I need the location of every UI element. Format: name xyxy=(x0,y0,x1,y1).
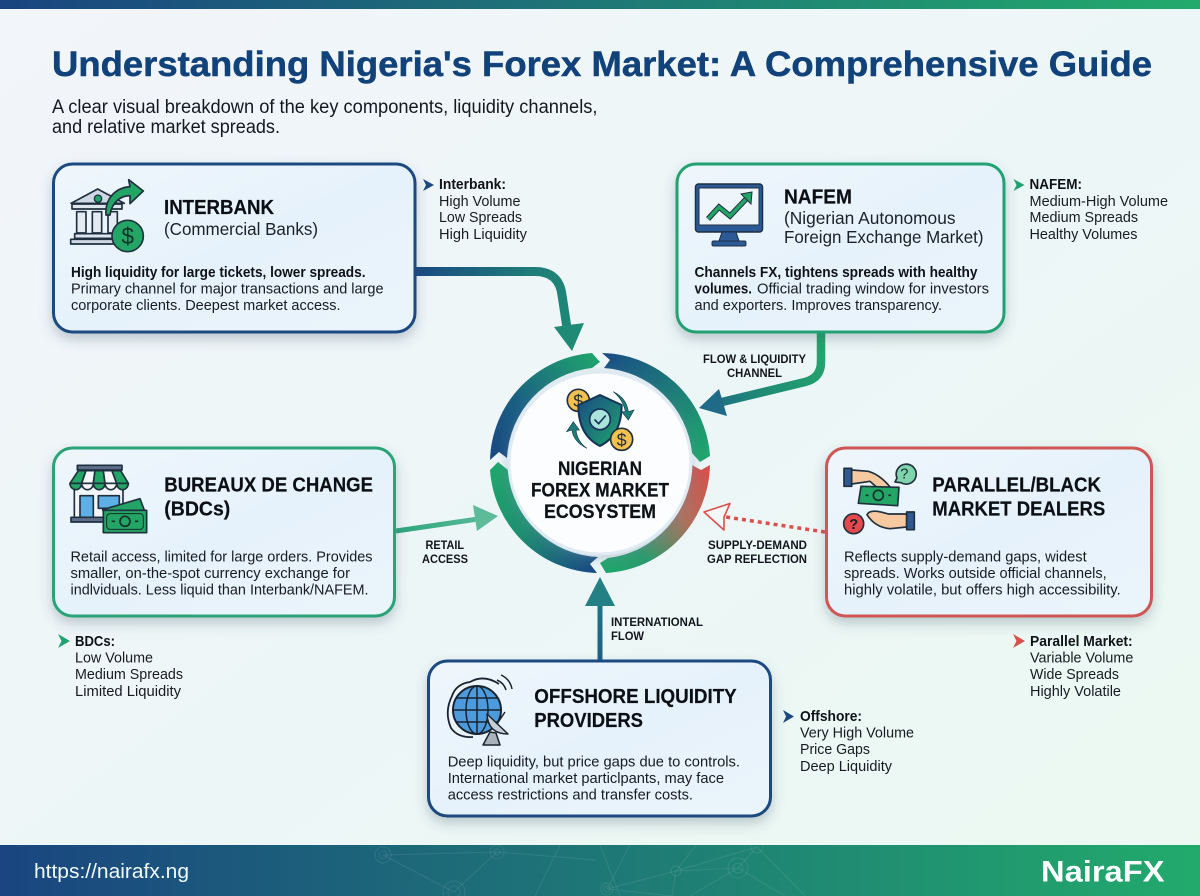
marker xyxy=(1014,179,1024,191)
marker xyxy=(58,634,70,648)
arrow: interbank to ecosystem xyxy=(416,272,584,351)
title: Understanding Nigeria's Forex Market: A Comprehensive Guide xyxy=(52,45,1152,84)
ecosystem hub xyxy=(490,353,710,573)
hub label: FOREX MARKET xyxy=(531,480,669,502)
arrow: offshore international flow xyxy=(585,577,615,661)
legend text: Low Volume xyxy=(75,650,153,666)
ring segment: bottom right xyxy=(600,465,710,573)
legend text: Interbank: xyxy=(439,177,506,193)
heading: (BDCs) xyxy=(164,498,230,520)
description: Channels FX, tightens spreads with healthy xyxy=(694,265,978,281)
legend text: Parallel Market: xyxy=(1030,634,1133,650)
description: smaller, on-the-spot currency exchange for xyxy=(70,566,350,582)
awning scallops xyxy=(70,483,128,490)
marker xyxy=(423,179,434,191)
legend text: Medium-High Volume xyxy=(1030,194,1168,210)
heading: MARKET DEALERS xyxy=(932,498,1105,520)
ring segment: top right xyxy=(602,353,710,462)
heading: PARALLEL/BLACK xyxy=(932,474,1101,496)
heading: NAFEM xyxy=(784,186,852,208)
label: flow and liquidity channel: CHANNEL xyxy=(727,366,782,380)
label: supply-demand gap reflection: SUPPLY-DEMAND xyxy=(708,538,807,552)
footer bar xyxy=(0,845,1200,896)
legend text: BDCs: xyxy=(75,634,115,650)
legend text: High Volume xyxy=(439,194,520,210)
icon: hands exchanging money: ? xyxy=(900,467,908,483)
legend text: Limited Liquidity xyxy=(75,684,182,700)
label: flow and liquidity channel: FLOW & LIQUIDITY xyxy=(703,352,806,366)
legend text xyxy=(1030,634,1133,700)
panel: NAFEM xyxy=(677,164,1004,332)
arrow: BDC retail access xyxy=(396,505,498,531)
icon: hands exchanging money xyxy=(844,464,916,534)
heading: OFFSHORE LIQUIDITY xyxy=(534,685,737,708)
legend: interbank xyxy=(423,177,528,243)
label: international flow xyxy=(611,615,703,643)
legend text: High Liquidity xyxy=(439,227,528,243)
legend text xyxy=(1030,177,1168,243)
subtitle: and relative market spreads. xyxy=(52,117,280,138)
card box xyxy=(54,164,415,332)
heading xyxy=(534,685,737,732)
ring segment: top left xyxy=(490,353,600,460)
legend: parallel market xyxy=(1013,634,1133,700)
hub label xyxy=(531,458,669,523)
hub label: ECOSYSTEM xyxy=(544,501,656,523)
footer brand: NairaFX xyxy=(1041,856,1164,888)
icon: bank with coin xyxy=(71,180,143,252)
legend text: NAFEM: xyxy=(1030,177,1082,193)
heading: PROVIDERS xyxy=(534,709,643,732)
description: access restrictions and transfer costs. xyxy=(448,788,693,804)
subtitle xyxy=(52,97,598,138)
panel: offshore liquidity providers xyxy=(428,661,770,816)
legend text: Medium Spreads xyxy=(75,667,183,683)
subtitle: A clear visual breakdown of the key components, liquidity channels, xyxy=(52,97,598,118)
hub label: NIGERIAN xyxy=(558,458,642,480)
description xyxy=(71,265,384,314)
description: International market particlpants, may face xyxy=(448,771,724,787)
marker xyxy=(783,710,794,723)
legend text: Highly Volatile xyxy=(1030,684,1121,700)
legend: offshore xyxy=(783,709,914,775)
description: highly volatile, but offers high accessibility. xyxy=(844,582,1121,598)
description xyxy=(448,754,740,804)
subheading: (Commercial Banks) xyxy=(164,219,318,239)
card box xyxy=(826,448,1152,616)
description: corporate clients. Deepest market access. xyxy=(71,298,340,314)
top accent bar xyxy=(0,0,1200,9)
icon: shield with coins: $ xyxy=(573,391,583,411)
heading: INTERBANK xyxy=(164,196,274,219)
icon: shop with banknotes xyxy=(70,465,147,533)
description: Deep liquidity, but price gaps due to controls. xyxy=(448,754,740,770)
description: Primary channel for major transactions and large xyxy=(71,282,384,298)
footer url: https://nairafx.ng xyxy=(34,861,189,883)
hub circle xyxy=(509,372,691,554)
legend text: Wide Spreads xyxy=(1030,667,1119,683)
label: retail access: RETAIL xyxy=(426,538,464,552)
description: and exporters. Improves transparency. xyxy=(694,298,942,314)
card box xyxy=(54,448,394,616)
panel: interbank xyxy=(54,164,415,332)
label: retail access: ACCESS xyxy=(422,552,468,566)
legend text: Price Gaps xyxy=(800,742,870,758)
icon: monitor with rising chart xyxy=(696,184,762,246)
description xyxy=(70,550,372,598)
arrow: parallel market dotted reflection xyxy=(704,504,825,532)
label: supply-demand gap reflection: GAP REFLECTION xyxy=(707,552,807,566)
legend text: Low Spreads xyxy=(439,210,522,226)
ring segment: bottom left xyxy=(490,462,598,573)
marker xyxy=(1013,634,1025,648)
description: Reflects supply-demand gaps, widest xyxy=(844,550,1088,566)
legend: NAFEM xyxy=(1014,177,1168,243)
card box xyxy=(428,661,770,816)
panel: bureaux de change xyxy=(54,448,394,616)
subheading: (Nigerian Autonomous xyxy=(784,208,956,228)
icon: bank with coin: $ xyxy=(121,223,134,249)
description: indlviduals. Less liquid than Interbank/NAFEM. xyxy=(70,582,368,598)
description xyxy=(694,265,989,314)
heading xyxy=(932,474,1105,520)
legend text: Medium Spreads xyxy=(1030,210,1138,226)
label: international flow: INTERNATIONAL xyxy=(611,615,703,629)
label: supply-demand gap reflection xyxy=(707,538,807,566)
panel: parallel market dealers xyxy=(826,448,1152,616)
description xyxy=(844,550,1121,598)
description: volumes. xyxy=(694,282,752,298)
card box xyxy=(677,164,1004,332)
arrow: NAFEM to ecosystem xyxy=(699,332,821,416)
icon: shield with coins xyxy=(567,389,634,450)
legend text: Very High Volume xyxy=(800,726,914,742)
subheading: Foreign Exchange Market) xyxy=(784,227,984,247)
legend text: Offshore: xyxy=(800,709,862,725)
icon: hands exchanging money: ? xyxy=(849,517,858,533)
legend text: Variable Volume xyxy=(1030,650,1133,666)
network pattern xyxy=(375,841,805,896)
description: Official trading window for investors xyxy=(757,282,989,298)
description: High liquidity for large tickets, lower spreads. xyxy=(71,265,366,281)
label: international flow: FLOW xyxy=(611,629,645,643)
icon: shield with coins: $ xyxy=(617,430,627,450)
legend: BDCs xyxy=(58,634,183,700)
footer xyxy=(0,841,1200,896)
description: Retail access, limited for large orders. Provides xyxy=(70,550,372,566)
heading: BUREAUX DE CHANGE xyxy=(164,474,373,496)
heading xyxy=(164,474,373,520)
legend text xyxy=(800,709,914,775)
legend text: Deep Liquidity xyxy=(800,759,893,775)
legend text xyxy=(439,177,528,243)
label: flow and liquidity channel xyxy=(703,352,806,380)
label: retail access xyxy=(422,538,468,566)
legend text xyxy=(75,634,183,700)
legend text: Healthy Volumes xyxy=(1030,227,1138,243)
description: spreads. Works outside official channels, xyxy=(844,566,1107,582)
subheading xyxy=(784,208,984,247)
icon: globe with satellite dish xyxy=(448,675,512,745)
awning stripes xyxy=(70,471,128,483)
